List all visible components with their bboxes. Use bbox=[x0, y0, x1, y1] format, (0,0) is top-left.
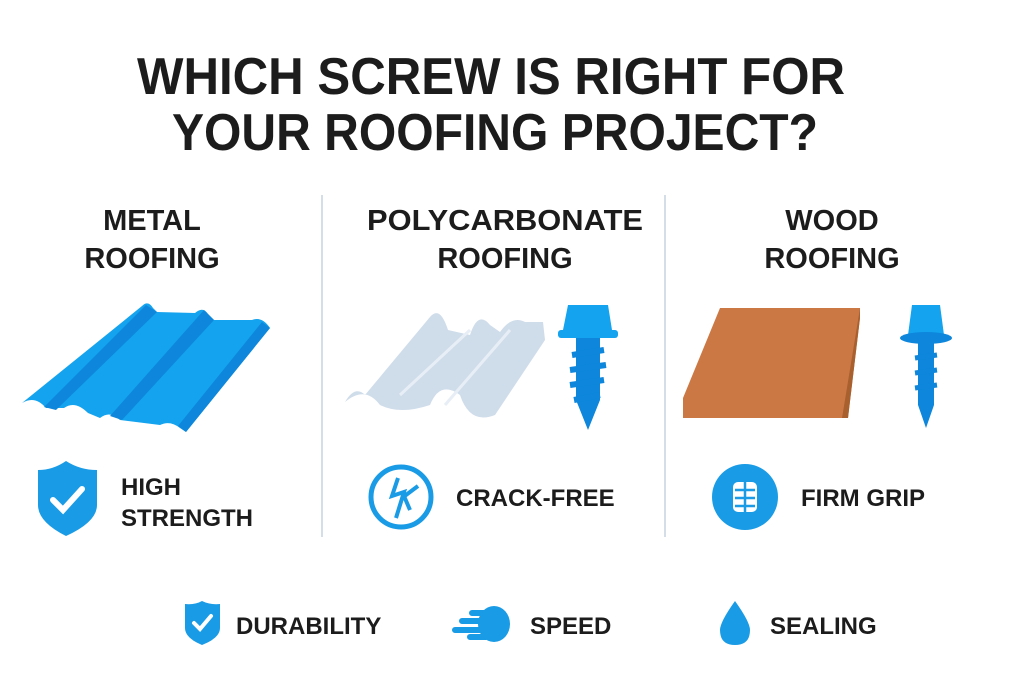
title: WHICH SCREW IS RIGHT FOR bbox=[137, 48, 845, 106]
screw: polycarbonate bbox=[558, 305, 618, 430]
legend: speed: SPEED bbox=[530, 613, 611, 640]
icon: firm grip bbox=[712, 464, 778, 530]
legend: durability bbox=[185, 601, 381, 645]
text: high strength: STRENGTH bbox=[121, 505, 253, 532]
heading: metal roofing: ROOFING bbox=[84, 243, 220, 275]
text: crack-free: CRACK-FREE bbox=[456, 485, 615, 512]
icon: shield high strength bbox=[38, 461, 97, 536]
screw: wood bbox=[900, 305, 952, 428]
legend: durability: DURABILITY bbox=[236, 613, 381, 640]
wood plank bbox=[683, 308, 860, 418]
heading: polycarbonate roofing: POLYCARBONATE bbox=[367, 205, 643, 237]
title bbox=[137, 48, 845, 162]
text: high strength: HIGH bbox=[121, 474, 181, 501]
heading: metal roofing: METAL bbox=[103, 205, 201, 237]
metal roof sheet bbox=[22, 303, 270, 432]
legend: speed bbox=[455, 606, 611, 642]
text: firm grip: FIRM GRIP bbox=[801, 485, 925, 512]
icon: crack-free bbox=[371, 467, 431, 527]
legend: sealing bbox=[720, 601, 877, 645]
heading: wood roofing bbox=[764, 205, 900, 275]
heading: wood roofing: ROOFING bbox=[764, 243, 900, 275]
heading: wood roofing: WOOD bbox=[785, 205, 879, 237]
heading: polycarbonate roofing: ROOFING bbox=[437, 243, 573, 275]
text: high strength bbox=[121, 474, 253, 532]
heading: metal roofing bbox=[84, 205, 220, 275]
heading: polycarbonate roofing bbox=[367, 205, 643, 275]
legend: sealing: SEALING bbox=[770, 613, 877, 640]
polycarbonate sheet bbox=[345, 313, 545, 418]
title: YOUR ROOFING PROJECT? bbox=[172, 104, 818, 162]
